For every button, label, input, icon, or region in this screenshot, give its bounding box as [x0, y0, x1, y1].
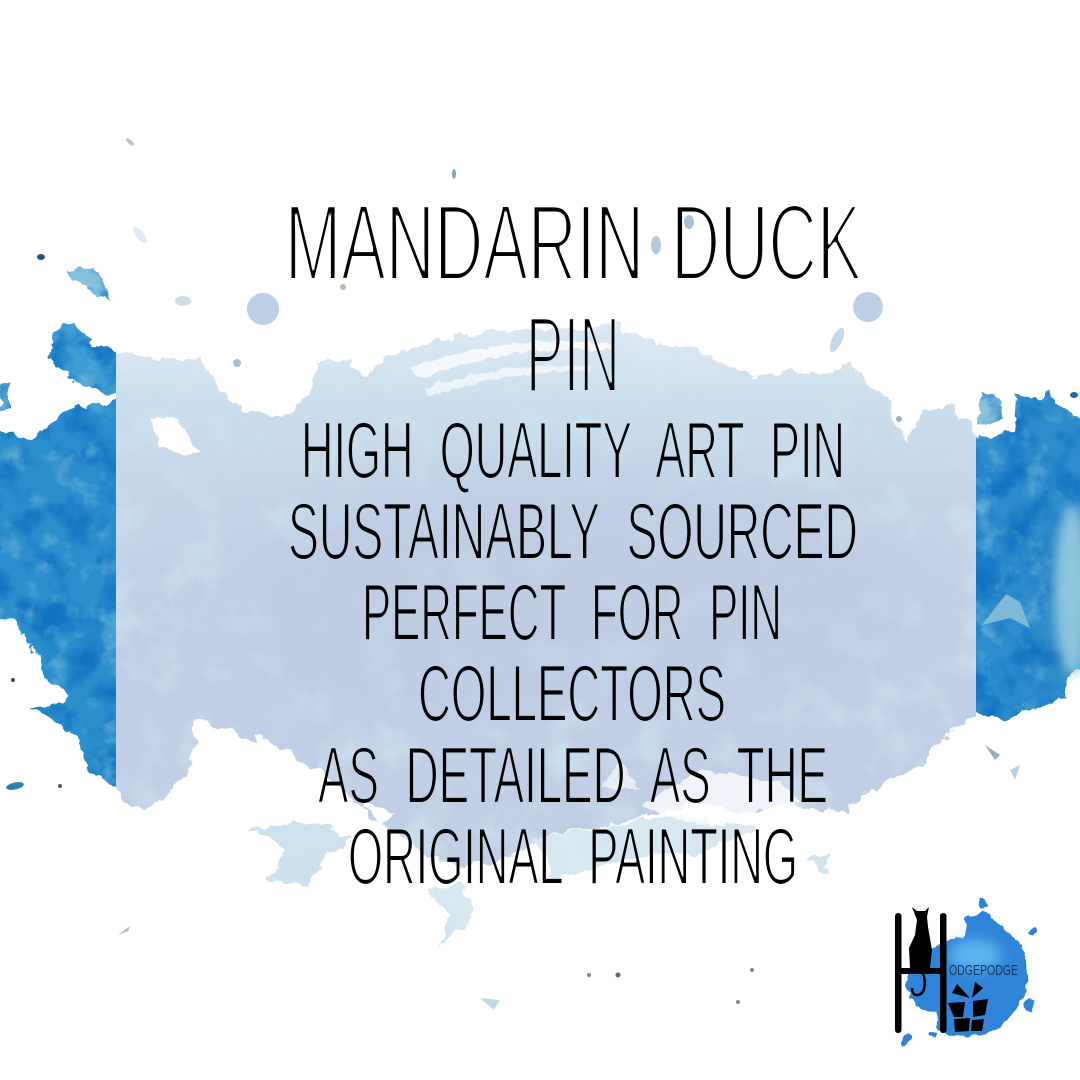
text block	[285, 182, 862, 902]
feature list: COLLECTORS	[418, 649, 726, 739]
left saturated paint	[0, 265, 120, 790]
logo blue splat	[901, 898, 1038, 1047]
icon: gift	[948, 982, 988, 1032]
title	[285, 182, 862, 416]
logo: Hodgepodge	[895, 898, 1038, 1047]
logo wordmark: ODGEPODGE	[949, 962, 1018, 979]
feature list	[288, 406, 858, 902]
logo letter H	[895, 913, 946, 1033]
icon: cat	[909, 907, 932, 995]
title: PIN	[526, 294, 620, 416]
right saturated paint	[970, 392, 1080, 720]
central pale watercolor splash	[110, 318, 980, 945]
